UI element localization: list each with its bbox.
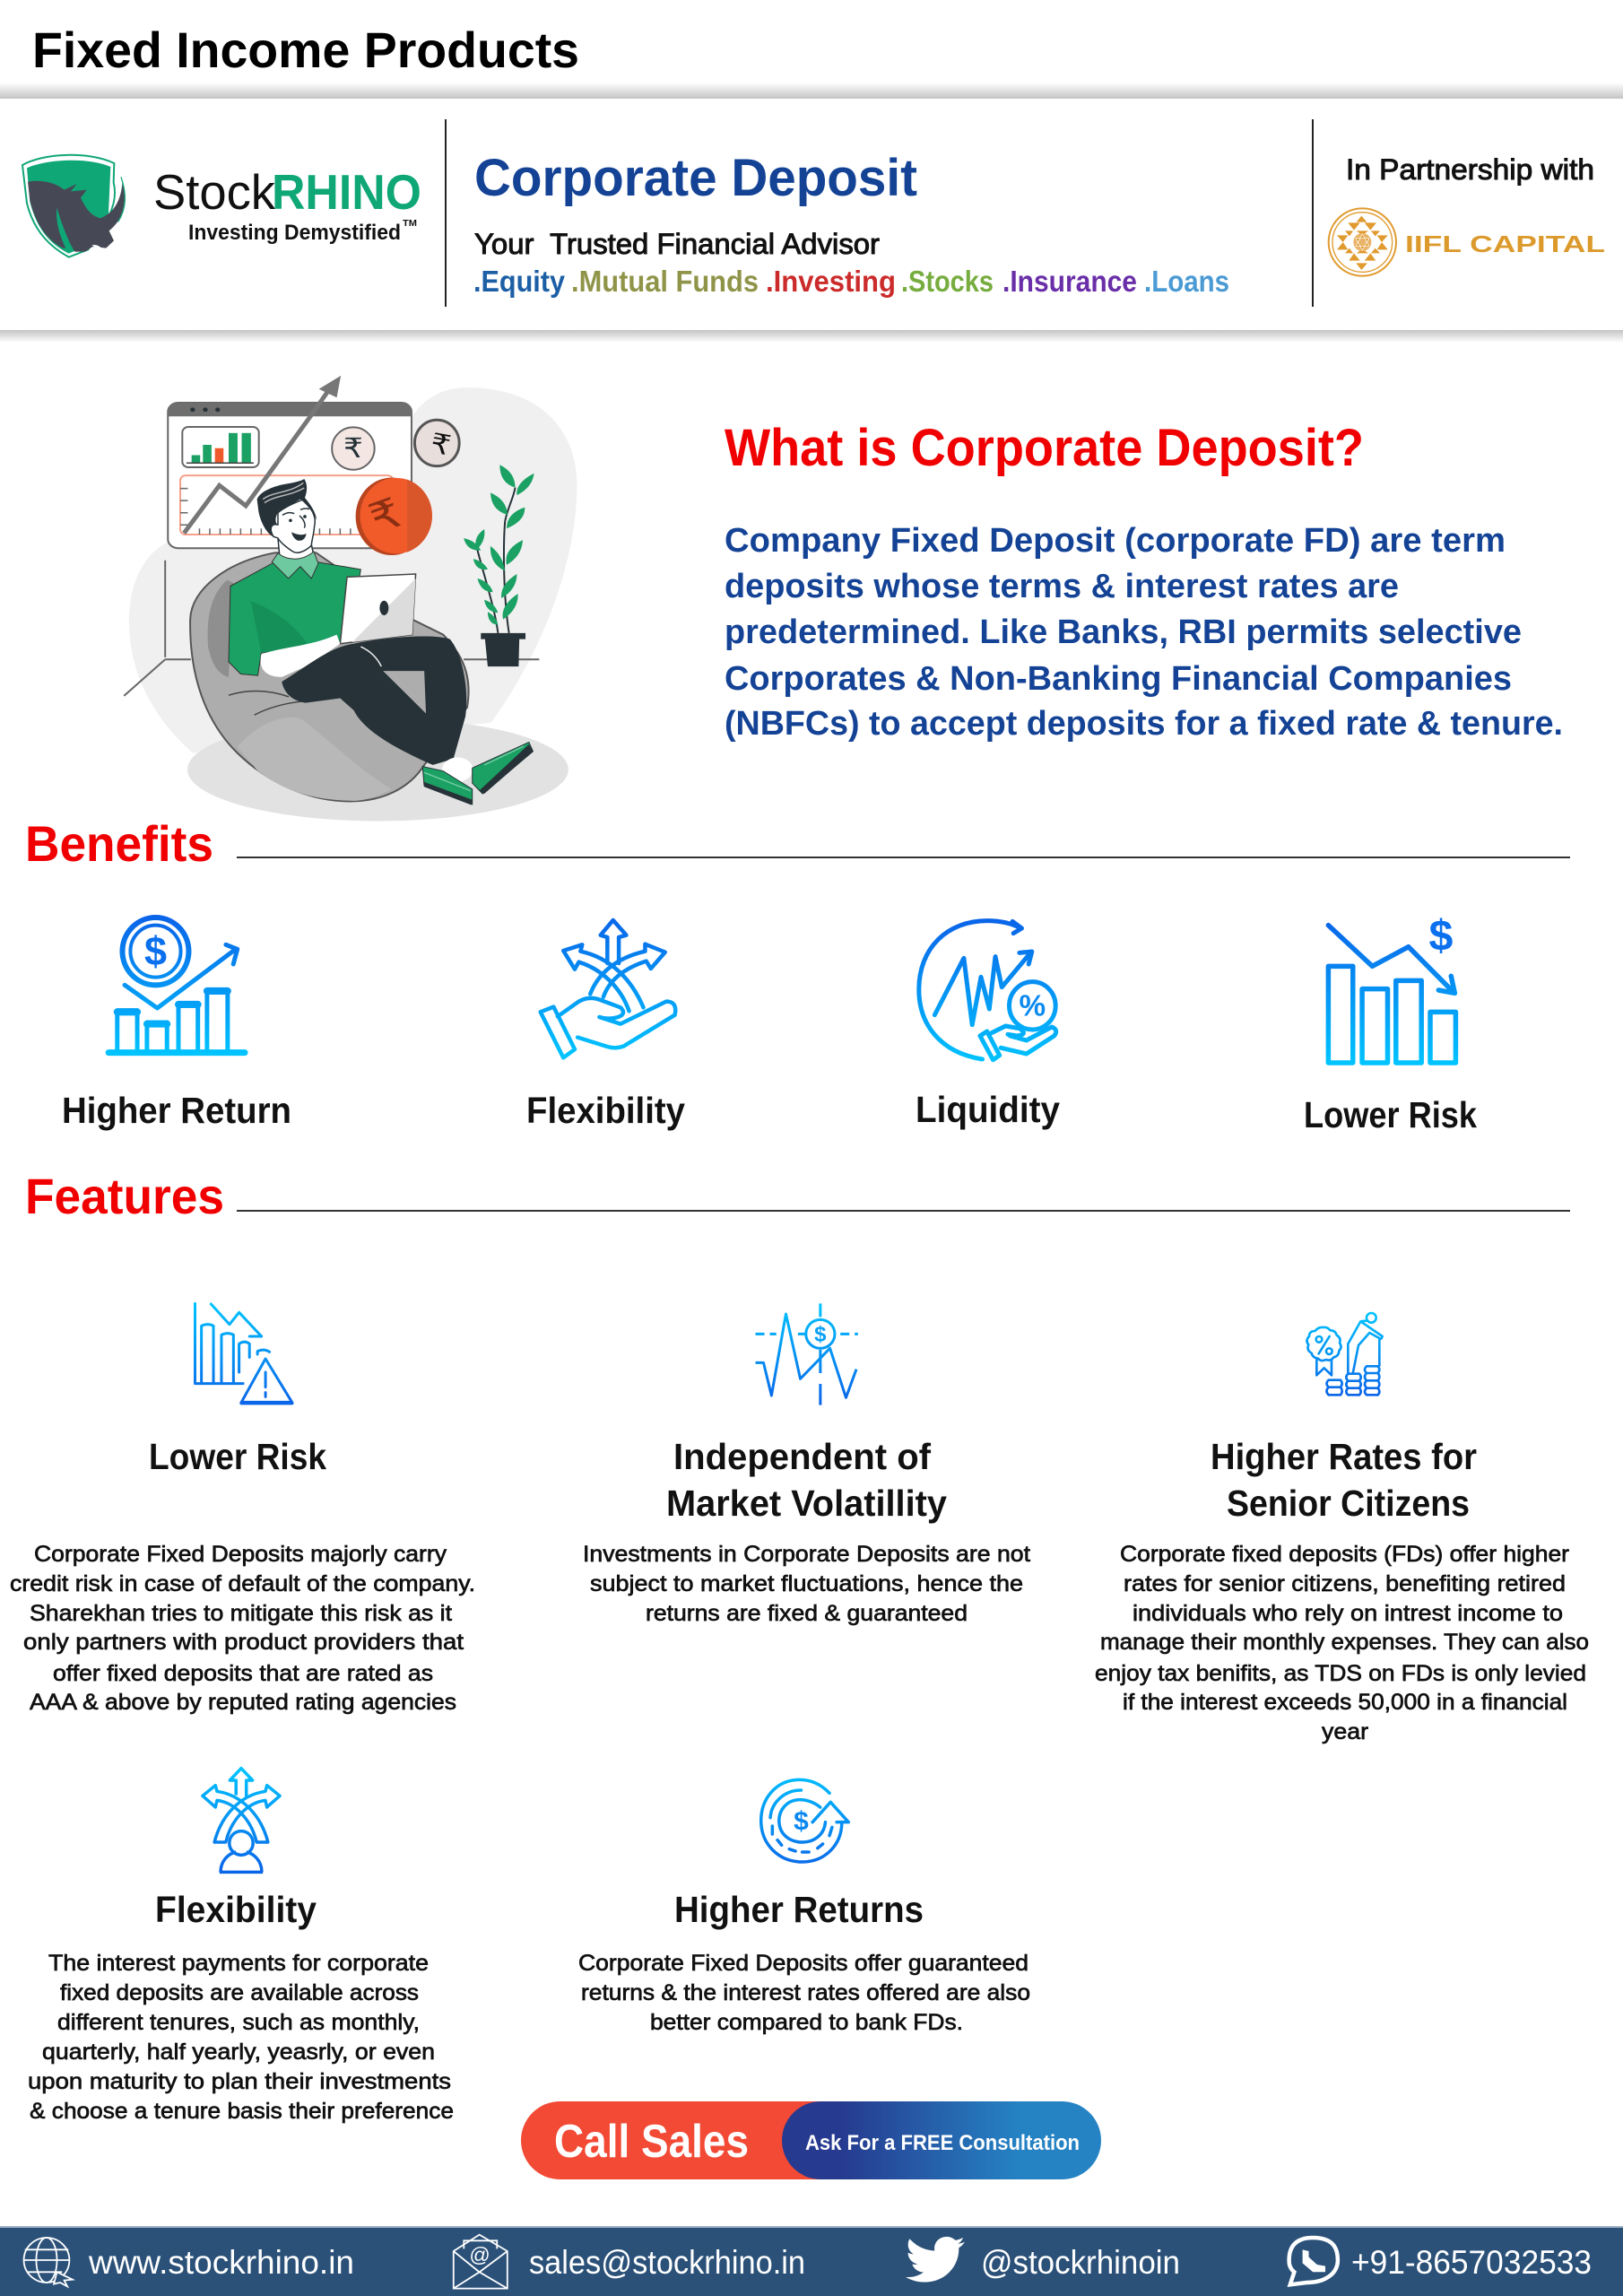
plant [464,465,534,666]
icon: falling bars [1328,911,1455,1063]
feature: Higher Rates for Senior Citizens: if the interest exceeds 50,000 in a financial [1123,1690,1567,1715]
benefit: Flexibility: Flexibility [526,1090,685,1131]
icon: dollar chart: $ [144,928,167,974]
logo: StockRHINO: Stock [153,164,275,220]
feature: Higher Rates for Senior Citizens: Senior Citizens [1227,1483,1470,1524]
logo: StockRHINO [22,155,421,257]
logo: StockRHINO: TM [403,219,417,229]
service list [473,265,1229,298]
call to action button [521,2101,1101,2179]
website [24,2238,354,2286]
feature: Higher Rates for Senior Citizens: manage their monthly expenses. They can also [1100,1630,1589,1655]
rupee coins [332,420,459,555]
icon: hand with arrows [541,920,675,1057]
floor shadow [187,718,568,821]
feature: Flexibility: upon maturity to plan their investments [28,2069,451,2094]
logo: StockRHINO: Investing Demystified [188,221,401,245]
background blob [129,387,577,752]
icon: whatsapp [1289,2238,1338,2284]
email: sales@stockrhino.in [529,2244,805,2281]
illustration: man on beanbag with laptop [124,376,577,821]
icon: falling bars: $ [1428,911,1453,960]
icon: circular dollar return: $ [794,1807,809,1837]
icon: circular arrow, zigzag and percent [919,921,1056,1060]
footer contact bar [0,2226,1623,2296]
feature: Higher Rates for Senior Citizens: individuals who rely on intrest income to [1133,1601,1563,1626]
benefit: Flexibility [526,920,685,1131]
feature: Flexibility: different tenures, such as monthly, [57,2010,420,2035]
feature: Higher Rates for Senior Citizens: Higher Rates for [1211,1436,1477,1477]
feature: Lower Risk: credit risk in case of default of the company. [10,1571,475,1596]
service list: .Investing [766,265,896,298]
feature: Lower Risk [10,1303,475,1715]
benefit: Lower Risk: Lower Risk [1304,1094,1477,1135]
heading: What is Corporate Deposit?: What is Corporate Deposit? [725,419,1364,477]
logo: StockRHINO: RHINO [272,164,421,220]
icon: dollar chart [108,918,245,1053]
intro paragraph: (NBFCs) to accept deposits for a fixed rate & tenure. [725,705,1563,743]
feature: Flexibility: Flexibility [155,1889,317,1930]
feature: Independent of Market Volatillity: Independent of [673,1436,931,1477]
feature: Independent of Market Volatillity: Market Volatillity [666,1483,947,1524]
person [229,479,533,805]
phone [1289,2238,1592,2284]
feature: Higher Rates for Senior Citizens: enjoy tax benifits, as TDS on FDs is only levied [1095,1661,1586,1686]
rupee coins: ₹ [343,432,363,465]
icon: envelope [454,2235,508,2289]
phone: +91-8657032533 [1351,2244,1592,2281]
benefit: Higher Return [62,918,291,1131]
icon: pulse with dollar [756,1303,858,1405]
icon: bars with warning [195,1303,292,1403]
feature: Lower Risk: Sharekhan tries to mitigate this risk as it [30,1601,452,1626]
benefit: Lower Risk [1304,911,1477,1135]
email [454,2235,805,2289]
twitter [906,2237,1180,2283]
rupee coins: ₹ [362,490,410,543]
icon: circular arrow, zigzag and percent: % [1020,990,1046,1023]
feature: Lower Risk: Lower Risk [149,1436,326,1477]
icon: rhino shield [22,155,126,257]
feature: Higher Returns: returns & the interest rates offered are also [581,1980,1030,2005]
icon: circular dollar return [761,1779,848,1862]
logo: IIFL Capital: IIFL CAPITAL [1405,230,1605,257]
service list: .Insurance [1002,265,1137,298]
intro paragraph: deposits whose terms & interest rates are [725,568,1399,605]
benefit: Higher Return: Higher Return [62,1090,291,1131]
partnership label: In Partnership with [1346,153,1594,186]
tagline: Your Trusted Financial Advisor [474,228,880,260]
rupee coins: ₹ [427,427,454,462]
feature: Lower Risk: offer fixed deposits that are rated as [53,1661,433,1686]
room lines [124,561,539,696]
twitter: @stockrhinoin [981,2244,1180,2281]
intro paragraph [725,522,1563,743]
call to action button: Call Sales [554,2116,749,2168]
feature: Higher Returns: Higher Returns [674,1889,924,1930]
feature: Flexibility: & choose a tenure basis their preference [30,2099,454,2124]
feature: Higher Returns [578,1779,1030,2035]
benefit: Liquidity: Liquidity [916,1089,1060,1130]
heading: Corporate Deposit: Corporate Deposit [474,149,917,207]
header band [0,83,1623,343]
section heading: Benefits: Benefits [25,815,213,872]
icon: sri yantra [1329,208,1396,276]
intro paragraph: Company Fixed Deposit (corporate FD) are term [725,522,1506,560]
feature: Lower Risk: AAA & above by reputed rating agencies [30,1690,456,1715]
icon: pulse with dollar: $ [814,1323,827,1347]
benefit: Liquidity [916,921,1060,1130]
feature: Higher Rates for Senior Citizens: rates for senior citizens, benefiting retired [1124,1571,1566,1596]
feature: Flexibility [28,1769,454,2124]
section heading: Features: Features [25,1168,224,1224]
feature: Independent of Market Volatillity: subject to market fluctuations, hence the [590,1571,1023,1596]
icon: bird [906,2237,965,2283]
feature: Higher Rates for Senior Citizens [1095,1313,1589,1744]
feature: Lower Risk: Corporate Fixed Deposits majorly carry [34,1542,447,1567]
feature: Flexibility: The interest payments for corporate [48,1951,429,1976]
head [257,479,318,578]
browser window with charts [168,376,412,548]
service list: .Equity [473,265,566,298]
icon: person with arrows [203,1769,280,1872]
service list: .Loans [1144,265,1229,298]
feature: Higher Returns: better compared to bank FDs. [650,2010,963,2035]
intro paragraph: predetermined. Like Banks, RBI permits selective [725,613,1522,651]
website: www.stockrhino.in [88,2244,354,2281]
service list: .Stocks [901,265,994,298]
service list: .Mutual Funds [571,265,759,298]
intro paragraph: Corporates & Non-Banking Financial Companies [725,660,1512,698]
feature: Higher Returns: Corporate Fixed Deposits offer guaranteed [578,1951,1028,1976]
feature: Lower Risk: only partners with product providers that [23,1630,464,1655]
feature: Higher Rates for Senior Citizens: Corporate fixed deposits (FDs) offer higher [1120,1542,1569,1567]
icon: globe [24,2238,73,2286]
feature: Independent of Market Volatillity [583,1303,1030,1626]
feature: Independent of Market Volatillity: returns are fixed & guaranteed [646,1601,968,1626]
page title: Fixed Income Products [32,22,579,78]
logo: IIFL Capital [1329,208,1605,276]
feature: Flexibility: quarterly, half yearly, yeasrly, or even [42,2039,435,2065]
icon: badge, senior and coins [1306,1313,1383,1395]
feature: Higher Rates for Senior Citizens: year [1322,1719,1368,1744]
feature: Flexibility: fixed deposits are available across [60,1980,419,2005]
beanbag [190,552,469,801]
email: @ [469,2243,490,2266]
call to action button: Ask For a FREE Consultation [805,2131,1080,2155]
feature: Independent of Market Volatillity: Investments in Corporate Deposits are not [583,1542,1030,1567]
